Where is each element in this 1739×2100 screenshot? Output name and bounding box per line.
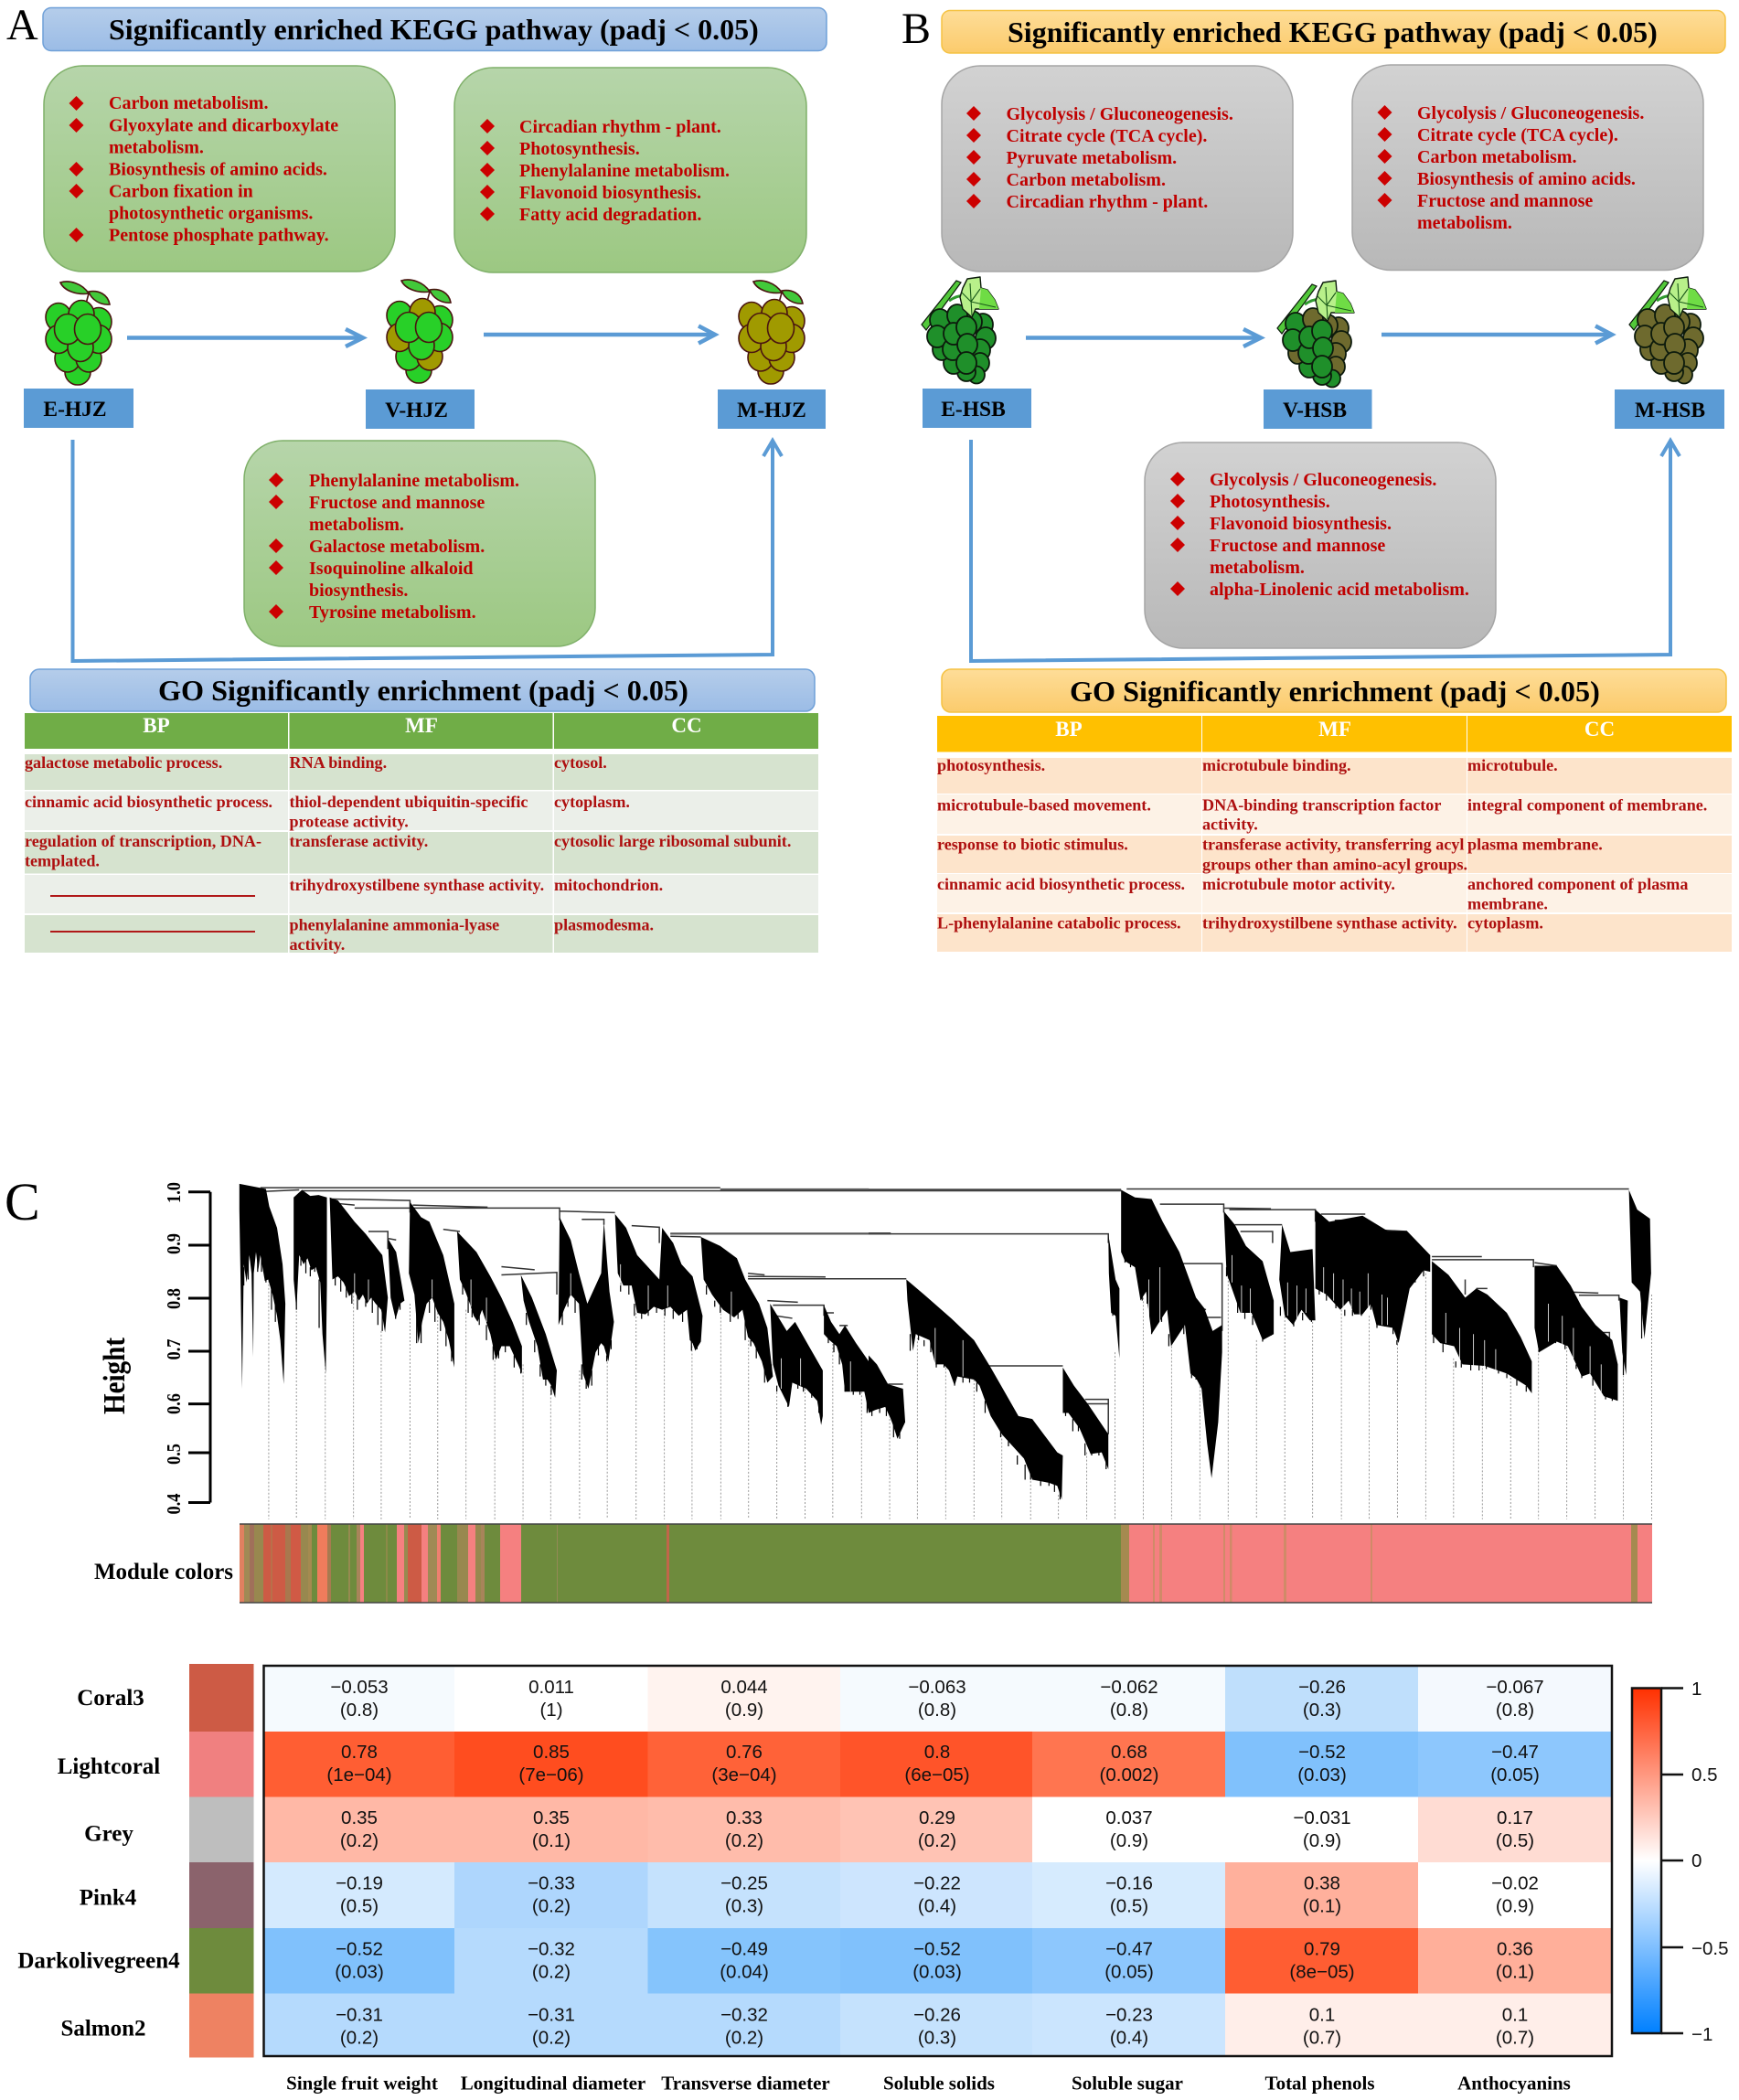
panel: V-HSB vs M-HSB pathways: Citrate cycle (TCA cycle). [1417,125,1618,145]
table: GO terms B: anchored component of plasma [1467,875,1688,893]
table: GO terms B: cinnamic acid biosynthetic process. [937,875,1185,893]
y axis: Height: 0.4 [163,1493,185,1514]
legend: module color blocks and labels [17,1664,254,2057]
table: GO terms B: response to biotic stimulus. [937,836,1128,854]
table: GO terms A: mitochondrion. [554,876,663,894]
panel: E-HJZ vs V-HJZ pathways: Pentose phosphate pathway. [109,225,329,245]
chart: module-trait correlation heatmap: 0.35 [341,1807,378,1828]
panel: E-HJZ vs V-HJZ pathways: photosynthetic organisms. [109,203,313,223]
legend: module color blocks and labels: Coral3 [77,1686,144,1711]
panel: V-HJZ vs M-HJZ pathways: Photosynthesis. [519,139,640,159]
axis labels: fruit traits: Soluble sugar [1072,2072,1183,2094]
panel: E-HJZ vs V-HJZ pathways: Carbon fixation in [109,181,253,201]
chart: module-trait correlation heatmap: (0.03) [1297,1764,1347,1786]
label: V-HJZ: V-HJZ [385,399,448,422]
panel: V-HSB vs M-HSB pathways: Glycolysis / Gluconeogenesis. [1417,103,1644,123]
panel: E-HJZ vs V-HJZ pathways: Carbon metabolism. [109,93,268,113]
panel: E-HSB vs V-HSB pathways: Carbon metabolism. [1006,170,1166,190]
panel: E-HJZ vs M-HJZ pathways: Phenylalanine metabolism. [309,471,519,491]
legend: module color blocks and labels: Salmon2 [60,2017,146,2041]
panel: E-HSB vs M-HSB pathways: Photosynthesis. [1210,492,1330,512]
legend: correlation color bar: 1 [1691,1679,1702,1700]
chart: module-trait correlation heatmap: (0.9) [1110,1830,1148,1851]
legend: module color blocks and labels: Darkolivegreen4 [17,1949,180,1973]
y axis: Height: 0.7 [163,1338,185,1360]
arrow: E-HJZ to V-HJZ [127,329,363,346]
chart: module-trait correlation heatmap: −0.031 [1293,1807,1351,1828]
legend: correlation color bar [1632,1679,1728,2045]
panel: E-HJZ vs M-HJZ pathways: metabolism. [309,515,404,535]
chart: module-trait correlation heatmap: (0.9) [1496,1896,1534,1916]
chart: module-trait correlation heatmap: (0.8) [1496,1700,1534,1721]
legend: module color blocks and labels: Grey [84,1821,133,1847]
chart: module-trait correlation heatmap: −0.053 [330,1677,389,1698]
chart: module-trait correlation heatmap: −0.23 [1105,2004,1153,2026]
chart: module-trait correlation heatmap: (0.03) [335,1962,384,1982]
table: GO terms A: trihydroxystilbene synthase activity. [289,876,544,894]
label: E-HJZ [24,389,133,428]
axis labels: fruit traits: Transverse diameter [661,2072,830,2094]
chart: module-trait correlation heatmap: (0.7) [1303,2028,1341,2048]
table: GO terms B: DNA-binding transcription factor [1202,795,1441,814]
panel A: HJZ KEGG and GO enrichment [6,1,827,954]
table: GO terms A: cytoplasm. [554,793,630,811]
chart: module-trait correlation heatmap: −0.31 [336,2004,383,2026]
chart: module-trait correlation heatmap: (0.8) [918,1700,956,1721]
legend: correlation color bar: −1 [1691,2024,1712,2045]
chart: module-trait correlation heatmap: (0.9) [1303,1830,1341,1851]
table: GO terms B [937,716,1732,952]
chart: module-trait correlation heatmap: 0.011 [528,1677,574,1698]
chart: module-trait correlation heatmap: −0.16 [1105,1872,1153,1894]
panel: E-HSB vs M-HSB pathways: Fructose and mannose [1210,536,1385,556]
chart: module-trait correlation heatmap: 0.17 [1497,1807,1533,1828]
chart: module-trait correlation heatmap: 0.1 [1309,2004,1335,2026]
chart: module-trait correlation heatmap: (0.03) [912,1962,962,1982]
table: GO terms A: phenylalanine ammonia-lyase [289,916,499,934]
axis labels: fruit traits: Soluble solids [883,2072,995,2094]
table: GO terms A: protease activity. [289,812,409,830]
legend: correlation color bar: 0.5 [1691,1764,1717,1786]
table: GO terms B: cytoplasm. [1467,914,1543,933]
icon: grape V-HJZ [387,280,453,383]
chart: gene clustering dendrogram [240,1184,1651,1519]
panel: V-HJZ vs M-HJZ pathways [454,68,806,272]
panel: E-HSB vs V-HSB pathways: Glycolysis / Gluconeogenesis. [1006,104,1233,124]
chart: module-trait correlation heatmap: −0.19 [336,1872,383,1894]
panel: E-HJZ vs M-HJZ pathways [244,441,595,646]
chart: module-trait correlation heatmap: (0.002) [1100,1764,1158,1786]
chart: module-trait correlation heatmap: 0.79 [1304,1938,1340,1960]
chart: module-trait correlation heatmap: (8e−05) [1289,1962,1355,1982]
table: GO terms B: plasma membrane. [1467,836,1603,854]
chart: module-trait correlation heatmap: −0.52 [336,1938,383,1960]
table: GO terms A: templated. [25,852,100,870]
label: M-HSB [1615,389,1724,429]
table: GO terms B: activity. [1202,815,1258,834]
table: GO terms B: trihydroxystilbene synthase activity. [1202,914,1457,933]
table: GO terms A: CC [671,714,702,737]
chart: module-trait correlation heatmap: −0.31 [528,2004,575,2026]
legend: module color blocks and labels: Pink4 [80,1885,137,1911]
panel: E-HJZ vs V-HJZ pathways: Glyoxylate and dicarboxylate [109,115,338,135]
chart: module-trait correlation heatmap: −0.52 [1298,1742,1346,1763]
chart: module-trait correlation heatmap: −0.02 [1491,1872,1539,1894]
legend: module color blocks and labels: Lightcoral [58,1754,160,1779]
chart: module-trait correlation heatmap: 0.8 [924,1742,950,1763]
chart: module-trait correlation heatmap: (0.1) [532,1830,571,1851]
table: GO terms A: galactose metabolic process. [25,753,222,772]
arrow: V-HSB to M-HSB [1382,325,1612,344]
chart: module-trait correlation heatmap: (0.2) [725,1830,763,1851]
label: V-HJZ [366,389,475,429]
chart: module-trait correlation heatmap: (0.1) [1496,1962,1534,1982]
panel: V-HSB vs M-HSB pathways: Biosynthesis of amino acids. [1417,169,1636,189]
panel: E-HJZ vs M-HJZ pathways: Isoquinoline alkaloid [309,559,474,579]
table: GO terms B: membrane. [1467,894,1548,912]
panel: V-HSB vs M-HSB pathways: Carbon metabolism. [1417,147,1576,167]
y axis: Height: 0.9 [163,1233,185,1254]
chart: module-trait correlation heatmap: −0.52 [913,1938,961,1960]
y axis: Height: 1.0 [163,1182,185,1203]
y axis: Height: 0.6 [163,1393,185,1414]
chart: module-trait correlation heatmap: 0.1 [1502,2004,1528,2026]
chart: module-trait correlation heatmap: 0.037 [1105,1807,1153,1828]
chart: module-trait correlation heatmap: −0.32 [528,1938,575,1960]
axis labels: fruit traits: Total phenols [1264,2072,1375,2094]
arrow: E-HJZ to M-HJZ [73,440,782,661]
chart: module-trait correlation heatmap: −0.067 [1486,1677,1544,1698]
panel: V-HJZ vs M-HJZ pathways: Phenylalanine metabolism. [519,161,730,181]
chart: module-trait correlation heatmap: (0.4) [1110,2028,1148,2048]
chart: module-trait correlation heatmap: 0.35 [533,1807,570,1828]
chart: module-trait correlation heatmap: 0.68 [1111,1742,1147,1763]
heading: GO enrichment A: GO Significantly enrichment (padj < 0.05) [158,674,688,707]
table: GO terms A: transferase activity. [289,832,428,850]
label: M-HSB: M-HSB [1635,399,1705,422]
y axis: Height [98,1182,210,1514]
icon: grape E-HJZ [46,282,112,385]
label: M-HJZ [718,389,826,429]
y axis: Height: 0.8 [163,1288,185,1309]
chart: module-trait correlation heatmap: (0.7) [1496,2028,1534,2048]
chart: module-trait correlation heatmap: 0.78 [341,1742,378,1763]
chart: module-trait correlation heatmap: −0.47 [1105,1938,1153,1960]
chart: module-trait correlation heatmap: (7e−06) [518,1764,584,1786]
chart: module-trait correlation heatmap: (0.8) [340,1700,379,1721]
chart: module-trait correlation heatmap: (0.3) [1303,1700,1341,1721]
chart: module-trait correlation heatmap: −0.062 [1100,1677,1158,1698]
panel: E-HJZ vs V-HJZ pathways: Biosynthesis of amino acids. [109,159,327,179]
panel: V-HSB vs M-HSB pathways: metabolism. [1417,213,1512,233]
chart: module-trait correlation heatmap: −0.33 [528,1872,575,1894]
panel: V-HJZ vs M-HJZ pathways: Circadian rhythm - plant. [519,117,721,137]
chart: module-trait correlation heatmap: (3e−04) [711,1764,777,1786]
chart: module-trait correlation heatmap: (1) [539,1700,563,1721]
label: E-HSB [923,389,1031,428]
heading: KEGG pathway B: Significantly enriched KEGG pathway (padj < 0.05) [1008,16,1658,48]
table: GO terms A: thiol-dependent ubiquitin-specific [289,793,528,811]
chart: module-trait correlation heatmap: (0.8) [1110,1700,1148,1721]
panel: V-HSB vs M-HSB pathways: Fructose and mannose [1417,191,1593,211]
chart: module-trait correlation heatmap: (0.9) [725,1700,763,1721]
table: GO terms B: microtubule binding. [1202,756,1351,774]
table: GO terms B: microtubule. [1467,756,1558,774]
chart: module-trait correlation heatmap: (0.5) [1496,1830,1534,1851]
label: V-HSB: V-HSB [1283,399,1347,422]
table: GO terms A: cytosol. [554,753,607,772]
chart: module-trait correlation heatmap: (0.4) [918,1896,956,1916]
table: GO terms B: CC [1584,718,1615,741]
table: GO terms B: microtubule-based movement. [937,795,1151,814]
chart: module-trait correlation heatmap: (6e−05) [904,1764,970,1786]
chart: module-trait correlation heatmap: (0.2) [532,2028,571,2048]
label: E-HSB: E-HSB [941,398,1006,421]
panel: E-HSB vs V-HSB pathways: Pyruvate metabolism. [1006,148,1177,168]
panel: E-HSB vs M-HSB pathways: Flavonoid biosynthesis. [1210,514,1392,534]
y axis: Height: Height [98,1337,132,1414]
chart: module-trait correlation heatmap: 0.36 [1497,1938,1533,1960]
chart: module-trait correlation heatmap: (0.2) [918,1830,956,1851]
icon: grape V-HSB [1277,281,1354,388]
panel B: HSB KEGG and GO enrichment [902,5,1732,952]
chart: module-trait correlation heatmap: −0.063 [908,1677,966,1698]
table: GO terms B: groups other than amino-acyl groups. [1202,856,1467,874]
axis labels: fruit traits: Single fruit weight [286,2072,438,2094]
label: V-HSB [1264,389,1371,429]
table: GO terms B: integral component of membrane. [1467,795,1707,814]
chart: module-trait correlation heatmap: 0.33 [726,1807,763,1828]
heading: GO enrichment B [942,669,1726,712]
table: GO terms A: RNA binding. [289,753,387,772]
panel: V-HJZ vs M-HJZ pathways: Flavonoid biosynthesis. [519,183,701,203]
chart: module-trait correlation heatmap: −0.49 [720,1938,768,1960]
chart: module-trait correlation heatmap: (0.2) [340,1830,379,1851]
panel: V-HSB vs M-HSB pathways [1352,65,1703,271]
chart: module-trait correlation heatmap [263,1666,1612,2056]
table: GO terms B: L-phenylalanine catabolic process. [937,914,1181,933]
chart: module-trait correlation heatmap: (0.3) [725,1896,763,1916]
y axis: Height: 0.5 [163,1444,185,1465]
chart: module-trait correlation heatmap: (0.05) [1490,1764,1540,1786]
panel: V-HJZ vs M-HJZ pathways: Fatty acid degradation. [519,205,701,225]
chart: module-trait correlation heatmap: −0.32 [720,2004,768,2026]
chart: module-trait correlation heatmap: −0.25 [720,1872,768,1894]
panel: E-HJZ vs M-HJZ pathways: biosynthesis. [309,581,408,601]
heading: GO enrichment A [30,669,815,711]
legend: correlation color bar: −0.5 [1691,1938,1728,1959]
chart: module-trait correlation heatmap: 0.85 [533,1742,570,1763]
chart: module-trait correlation heatmap: 0.044 [720,1677,768,1698]
arrow: V-HJZ to M-HJZ [484,325,715,344]
chart: module-trait correlation heatmap: −0.47 [1491,1742,1539,1763]
chart: module-trait correlation heatmap: (0.04) [720,1962,769,1982]
chart: module-trait correlation heatmap: (0.2) [532,1896,571,1916]
table: GO terms B: BP [1055,718,1083,741]
panel: E-HJZ vs V-HJZ pathways: metabolism. [109,137,204,157]
chart: module-trait correlation heatmap: 0.29 [919,1807,955,1828]
panel: E-HJZ vs M-HJZ pathways: Fructose and mannose [309,493,485,513]
legend: correlation color bar: 0 [1691,1850,1702,1871]
table: GO terms A: activity. [289,935,345,954]
chart: module-trait correlation heatmap: −0.22 [913,1872,961,1894]
chart: module-trait correlation heatmap: (0.3) [918,2028,956,2048]
table: GO terms B: photosynthesis. [937,756,1045,774]
table: GO terms A: regulation of transcription, DNA- [25,832,261,850]
chart: module-trait correlation heatmap: (0.2) [725,2028,763,2048]
panel: E-HSB vs M-HSB pathways: metabolism. [1210,558,1305,578]
chart: module-trait correlation heatmap: −0.26 [1298,1677,1346,1698]
panel: E-HJZ vs M-HJZ pathways: Galactose metabolism. [309,537,485,557]
panel: E-HJZ vs V-HJZ pathways [44,66,395,272]
table: GO terms B: MF [1318,718,1351,741]
chart: module-trait correlation heatmap: (1e−04) [326,1764,392,1786]
chart: module-trait correlation heatmap: 0.76 [726,1742,763,1763]
table: GO terms B: transferase activity, transferring acyl [1202,836,1464,854]
panel: E-HSB vs M-HSB pathways [1145,442,1496,648]
heading: KEGG pathway A: Significantly enriched KEGG pathway (padj < 0.05) [109,13,759,46]
chart: module-trait correlation heatmap: −0.26 [913,2004,961,2026]
axis labels: fruit traits: Longitudinal diameter [461,2072,645,2094]
arrow: E-HSB to M-HSB [971,440,1680,661]
table: GO terms A: BP [143,714,170,737]
arrow: E-HSB to V-HSB [1026,329,1261,346]
panel C: WGCNA dendrogram and module-trait heatmap [5,1172,1728,2094]
chart: module-trait correlation heatmap: (0.1) [1303,1896,1341,1916]
table: GO terms A [25,713,818,954]
chart: module-trait correlation heatmap: (0.2) [532,1962,571,1982]
panel: E-HSB vs V-HSB pathways [942,66,1293,272]
panel letter A: A [6,1,38,49]
panel letter C: C [5,1172,40,1231]
table: GO terms B: microtubule motor activity. [1202,875,1395,893]
label: Module colors: Module colors [94,1560,233,1584]
label: M-HJZ: M-HJZ [737,399,806,422]
icon: grape E-HSB [922,277,998,384]
panel: E-HSB vs V-HSB pathways: Citrate cycle (TCA cycle). [1006,126,1207,146]
panel: E-HSB vs M-HSB pathways: Glycolysis / Gluconeogenesis. [1210,470,1436,490]
axis labels: fruit traits [286,2072,1571,2094]
chart: module-trait correlation heatmap: 0.38 [1304,1872,1340,1894]
label: E-HJZ: E-HJZ [43,398,107,421]
icon: grape M-HJZ [739,281,805,384]
panel: E-HSB vs V-HSB pathways: Circadian rhythm - plant. [1006,192,1208,212]
table: GO terms A: cinnamic acid biosynthetic process. [25,793,272,811]
table: GO terms A: MF [405,714,438,737]
heading: KEGG pathway B [942,11,1725,53]
axis labels: fruit traits: Anthocyanins [1457,2072,1571,2094]
chart: module color bar [240,1524,1652,1603]
chart: module-trait correlation heatmap: (0.5) [340,1896,379,1916]
table: GO terms A: plasmodesma. [554,916,654,934]
chart: module-trait correlation heatmap: (0.05) [1104,1962,1154,1982]
panel: E-HSB vs M-HSB pathways: alpha-Linolenic acid metabolism. [1210,580,1469,600]
table: GO terms A: cytosolic large ribosomal subunit. [554,832,791,850]
chart: module-trait correlation heatmap: (0.2) [340,2028,379,2048]
chart: module-trait correlation heatmap: (0.5) [1110,1896,1148,1916]
heading: GO enrichment B: GO Significantly enrichment (padj < 0.05) [1070,675,1600,708]
panel: E-HJZ vs M-HJZ pathways: Tyrosine metabolism. [309,602,476,623]
heading: KEGG pathway A [43,7,827,51]
icon: grape M-HSB [1629,277,1706,384]
panel letter B: B [902,5,931,53]
